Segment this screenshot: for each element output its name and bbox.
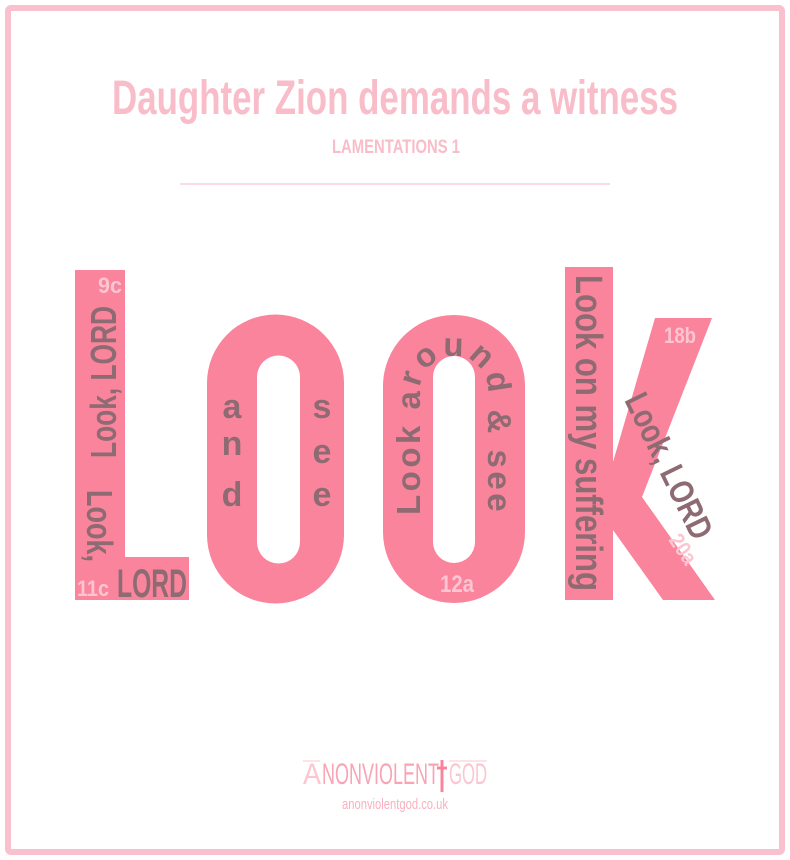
text: see: e — [313, 433, 331, 471]
text: and: n — [222, 425, 242, 463]
label 20a: 20a — [664, 529, 703, 570]
text: Look, LORD diagonal: Look, LORD — [617, 387, 720, 546]
text: Look around & see: Look around & see — [396, 338, 512, 513]
footer logo: NONVIOLENT — [322, 758, 439, 791]
text: and: a — [223, 388, 243, 426]
text: LORD foot: LORD — [117, 562, 187, 606]
text: Look, LORD on L: Look, LORD — [83, 306, 124, 458]
text: see: s — [313, 388, 331, 426]
text: Look, on L: Look, — [79, 490, 120, 562]
text: see — [313, 388, 331, 514]
label 12a: 12a — [440, 571, 475, 598]
text: Look on my suffering: Look on my suffering — [567, 275, 609, 591]
label 18b: 18b — [664, 323, 696, 348]
text: and — [222, 388, 243, 514]
subtitle: LAMENTATIONS 1 — [332, 137, 460, 158]
text: see: e — [313, 476, 331, 514]
letter o 2 — [383, 315, 525, 603]
text: and: d — [222, 476, 242, 514]
label 11c: 11c — [77, 576, 109, 601]
footer logo: A — [303, 758, 321, 791]
letter k — [565, 267, 720, 600]
letter o 1 — [207, 314, 344, 604]
label 9c: 9c — [98, 273, 122, 298]
letter L — [75, 270, 189, 606]
footer url: anonviolentgod.co.uk — [342, 796, 448, 813]
footer logo: GOD — [449, 758, 487, 791]
